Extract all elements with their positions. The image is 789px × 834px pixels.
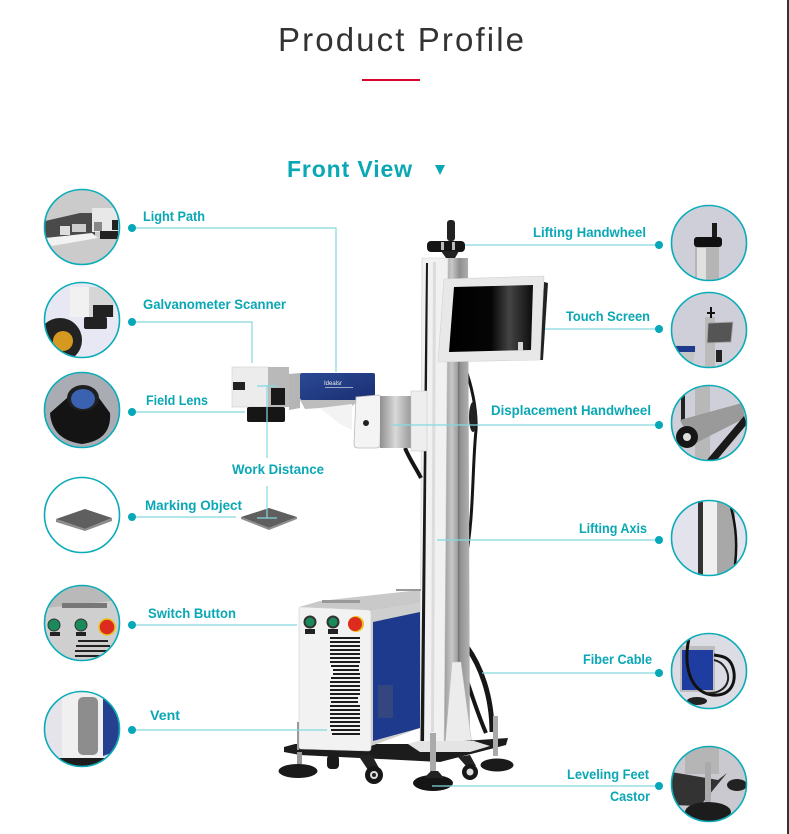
lifting handwheel <box>427 220 465 258</box>
callout: displacement handwheel: Displacement Handwheel <box>491 402 651 418</box>
thumbnail: light path <box>44 189 120 265</box>
column <box>420 258 470 748</box>
galvanometer head <box>232 367 289 407</box>
arm cable <box>405 448 421 478</box>
callout: work distance <box>232 385 324 518</box>
callout: marking object: Marking Object <box>145 497 242 513</box>
callout: light path <box>128 208 336 372</box>
thumbnail: fiber cable <box>671 633 747 709</box>
thumbnail: vent <box>44 691 120 767</box>
callout: touch screen <box>545 308 663 333</box>
light path arm: Idealsr <box>324 381 342 387</box>
callout: leveling feet and castor <box>432 766 663 804</box>
thumbnail: field lens <box>44 372 120 448</box>
cables behind column <box>463 362 492 733</box>
laser cabinet <box>299 589 421 751</box>
callout: leveling feet and castor: Castor <box>610 788 650 804</box>
touch screen <box>438 276 548 362</box>
displacement bracket <box>354 391 427 451</box>
callout: leveling feet and castor: Leveling Feet <box>567 766 649 782</box>
column foot bracket <box>445 662 472 745</box>
callout: vent: Vent <box>150 707 180 723</box>
title: Product Profile <box>278 21 524 58</box>
thumbnail: touch screen <box>671 292 747 369</box>
page edge <box>787 0 789 834</box>
thumbnail: lifting axis <box>671 500 747 576</box>
callout: switch button <box>128 605 297 629</box>
callout: lifting axis: Lifting Axis <box>579 520 647 536</box>
callout: light path: Light Path <box>143 208 205 224</box>
callout: work distance: Work Distance <box>232 461 324 477</box>
thumbnail: lifting handwheel <box>671 205 747 282</box>
callout: fiber cable <box>482 651 663 677</box>
callout: fiber cable: Fiber Cable <box>583 651 652 667</box>
callout: switch button: Switch Button <box>148 605 236 621</box>
field lens <box>247 407 285 422</box>
callout: displacement handwheel <box>392 402 663 429</box>
callout: marking object <box>128 497 242 521</box>
callout: lifting axis <box>437 520 663 544</box>
callout: vent <box>128 707 327 734</box>
right thumbnails <box>671 205 747 822</box>
marking object <box>241 508 297 530</box>
thumbnail: galvanometer <box>38 282 120 362</box>
thumbnail: displacement handwheel <box>671 385 747 461</box>
light path arm <box>289 373 375 430</box>
cabinet buttons <box>304 616 316 628</box>
callout: lifting handwheel <box>465 224 663 249</box>
section heading: front view: Front View <box>287 156 412 182</box>
thumbnail: marking object <box>44 478 120 552</box>
vent slots <box>330 637 360 735</box>
title underline <box>362 79 420 81</box>
column base <box>408 741 490 752</box>
thumbnail: switch button <box>44 585 120 661</box>
callout: field lens: Field Lens <box>146 392 208 408</box>
callout: lifting handwheel: Lifting Handwheel <box>533 224 646 240</box>
callout: field lens <box>128 392 245 416</box>
machine illustration <box>232 220 548 791</box>
thumbnail: leveling feet <box>671 746 747 822</box>
callout: touch screen: Touch Screen <box>566 308 650 324</box>
icon: down triangle <box>435 165 445 175</box>
left thumbnails <box>38 189 120 767</box>
feet and castors <box>278 716 514 791</box>
callout: galvanometer scanner <box>128 296 287 363</box>
base plate <box>284 738 508 762</box>
callout: galvanometer scanner: Galvanometer Scanner <box>143 296 287 312</box>
